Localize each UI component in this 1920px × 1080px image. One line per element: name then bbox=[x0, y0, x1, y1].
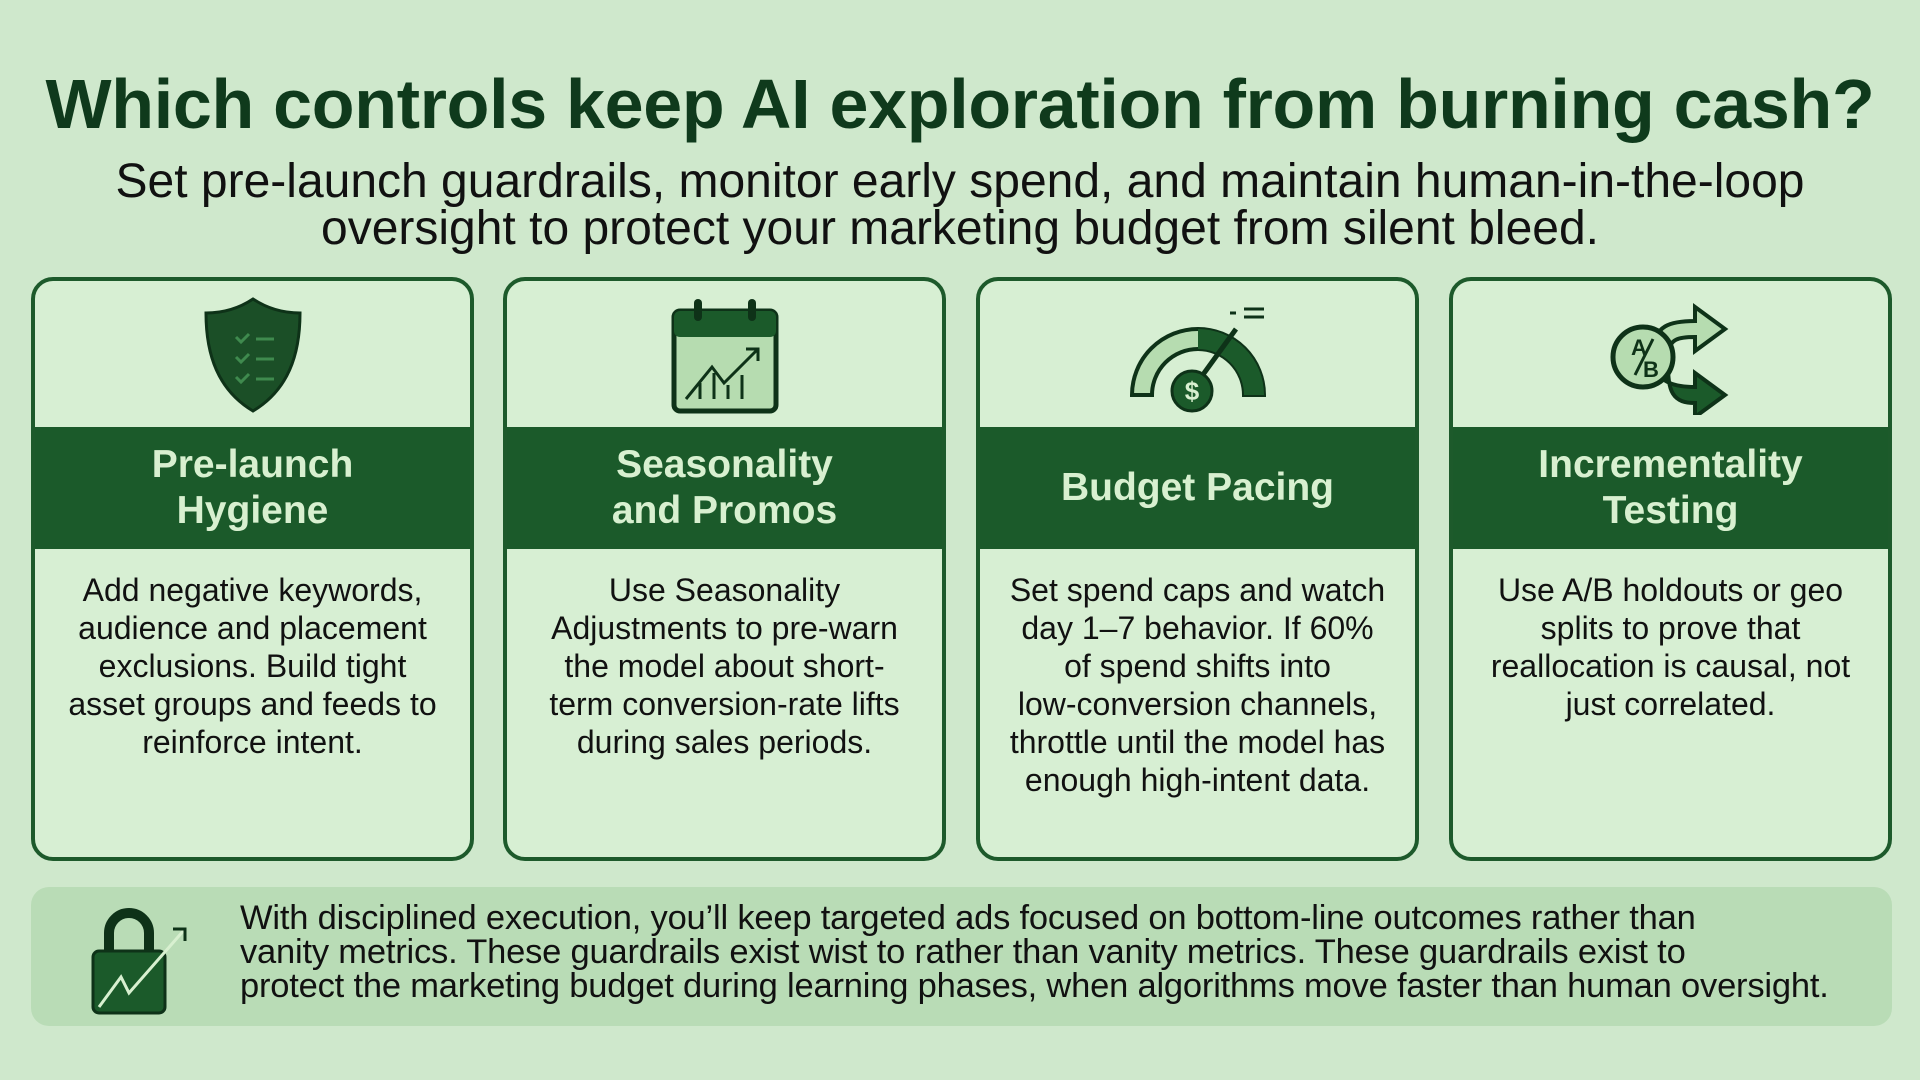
panel: pre-launch hygiene bbox=[31, 277, 474, 861]
panel: budget pacing bbox=[976, 277, 1419, 861]
callout text: protect the marketing budget during learning phases, when algorithms move faster than human oversight. bbox=[240, 967, 1829, 1005]
bottom callout bbox=[31, 887, 1892, 1026]
text: enough high-intent data. bbox=[1025, 762, 1370, 798]
icon: shield bbox=[204, 297, 302, 413]
callout text: vanity metrics. These guardrails exist wist to rather than vanity metrics. These guardrails exist to bbox=[240, 933, 1686, 971]
text bbox=[1010, 572, 1385, 798]
callout text: With disciplined execution, you’ll keep targeted ads focused on bottom-line outcomes rather than bbox=[240, 899, 1696, 937]
text bbox=[68, 572, 437, 760]
text: exclusions. Build tight bbox=[99, 648, 406, 684]
icon: calendar chart bbox=[672, 299, 778, 414]
heading: Incrementality bbox=[1538, 443, 1803, 486]
icon: A/B split bbox=[1610, 303, 1728, 415]
text: reinforce intent. bbox=[142, 724, 363, 760]
icon: A/B split: A bbox=[1630, 335, 1646, 360]
text: term conversion-rate lifts bbox=[549, 686, 900, 722]
subtitle bbox=[116, 155, 1804, 255]
subtitle: oversight to protect your marketing budget from silent bleed. bbox=[321, 202, 1599, 255]
text: throttle until the model has bbox=[1010, 724, 1385, 760]
title: Which controls keep AI exploration from burning cash? bbox=[46, 65, 1874, 143]
panel: seasonality bbox=[503, 277, 946, 861]
text: splits to prove that bbox=[1541, 610, 1800, 646]
text: just correlated. bbox=[1566, 686, 1775, 722]
heading bbox=[980, 427, 1415, 549]
text: day 1–7 behavior. If 60% bbox=[1021, 610, 1374, 646]
heading bbox=[507, 427, 942, 549]
text: during sales periods. bbox=[577, 724, 872, 760]
heading: Seasonality bbox=[616, 443, 833, 486]
text: low-conversion channels, bbox=[1018, 686, 1377, 722]
heading bbox=[35, 427, 470, 549]
heading: Testing bbox=[1603, 489, 1738, 532]
icon: gauge: $ bbox=[1184, 376, 1199, 406]
text: of spend shifts into bbox=[1064, 648, 1331, 684]
icon: A/B split: B bbox=[1642, 357, 1658, 382]
text: Use Seasonality bbox=[609, 572, 840, 608]
heading: and Promos bbox=[612, 489, 837, 532]
text: reallocation is causal, not bbox=[1491, 648, 1850, 684]
text: Add negative keywords, bbox=[83, 572, 422, 608]
text bbox=[1491, 572, 1850, 722]
callout text bbox=[240, 899, 1829, 1005]
heading: Budget Pacing bbox=[1061, 466, 1334, 509]
text: the model about short- bbox=[564, 648, 885, 684]
heading: Hygiene bbox=[177, 489, 328, 532]
text: Use A/B holdouts or geo bbox=[1498, 572, 1843, 608]
panel: incrementality bbox=[1449, 277, 1892, 861]
text: audience and placement bbox=[78, 610, 427, 646]
icon: lock with trend bbox=[92, 908, 186, 1014]
text: asset groups and feeds to bbox=[68, 686, 437, 722]
heading: Pre-launch bbox=[152, 443, 353, 486]
text bbox=[549, 572, 900, 760]
text: Adjustments to pre-warn bbox=[551, 610, 898, 646]
heading bbox=[1453, 427, 1888, 549]
subtitle: Set pre-launch guardrails, monitor early spend, and maintain human-in-the-loop bbox=[116, 155, 1804, 208]
text: Set spend caps and watch bbox=[1010, 572, 1385, 608]
icon: gauge bbox=[1130, 308, 1266, 412]
